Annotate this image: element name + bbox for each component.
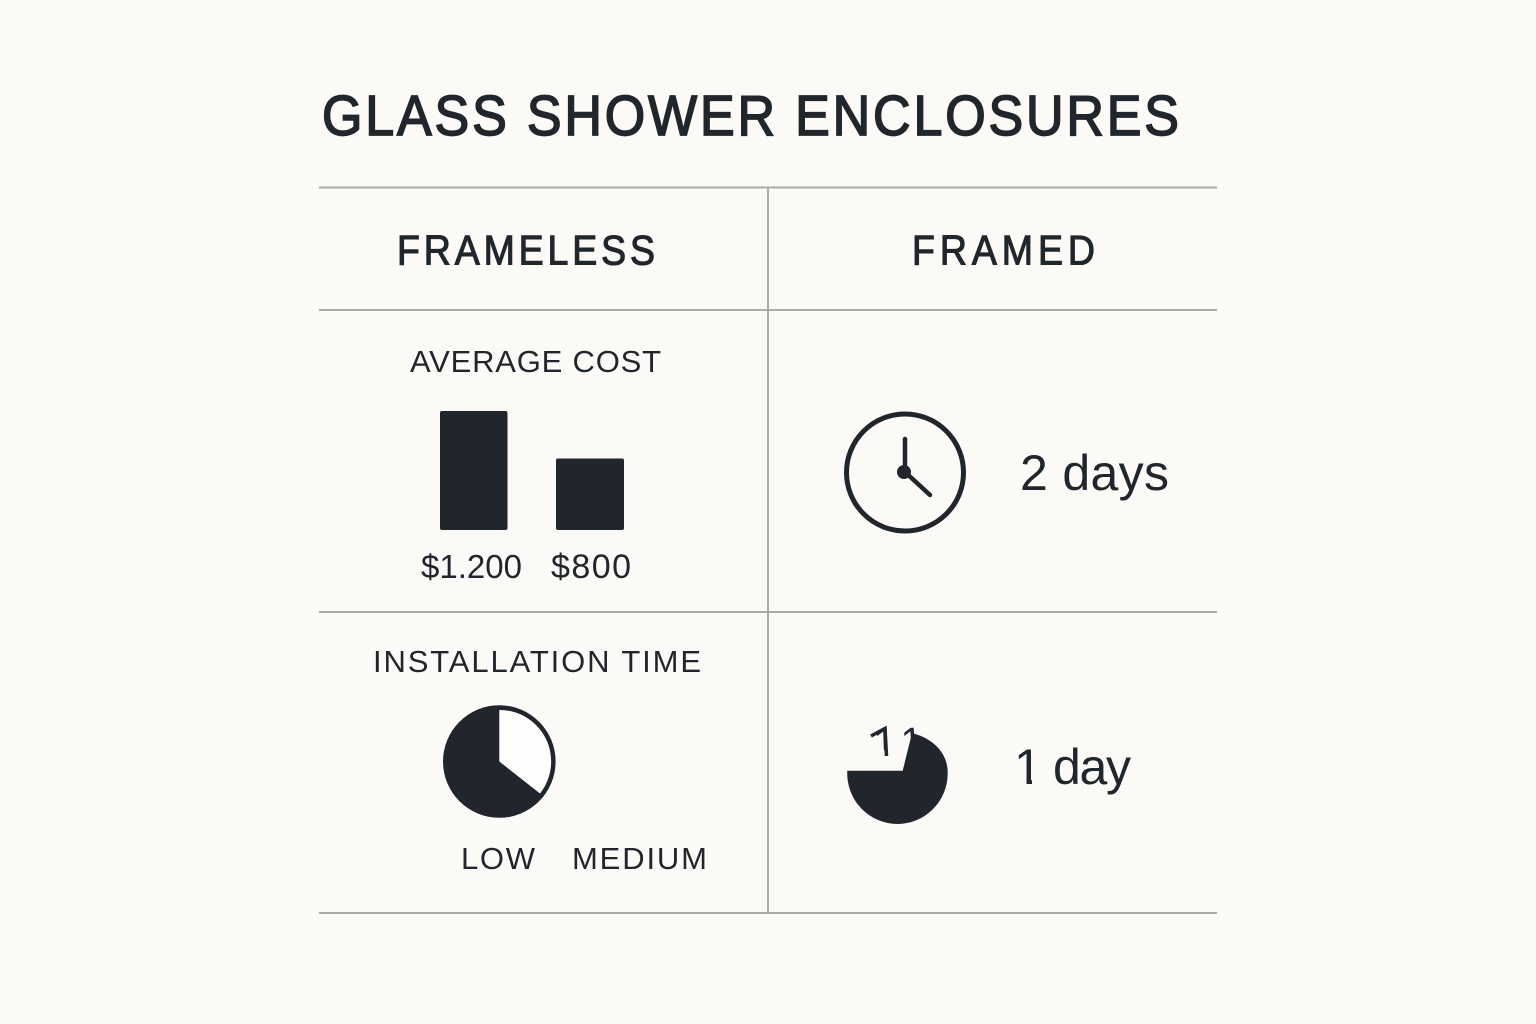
panel: installation time (373, 644, 707, 876)
panel: framed installation duration (846, 414, 1169, 531)
pie label: low: LOW (461, 841, 536, 876)
column heading: framed: FRAMED (912, 228, 1095, 274)
icon: clock (846, 414, 964, 531)
icon: partial pie with clipped numerals: 1 (873, 720, 897, 765)
installation time label: INSTALLATION TIME (373, 644, 701, 679)
duration: 1 day: 1 day (1014, 739, 1131, 795)
duration: 2 days: 2 days (1020, 445, 1169, 501)
icon: partial pie with clipped numerals (847, 720, 948, 824)
average cost label: AVERAGE COST (410, 344, 661, 379)
panel: framed one-day indicator (847, 720, 1131, 824)
bar: $1,200 (440, 411, 508, 530)
icon: partial pie with clipped numerals: 1 (900, 720, 925, 765)
bar chart (440, 411, 624, 530)
bar: $800 (556, 458, 624, 530)
column heading: frameless: FRAMELESS (397, 228, 655, 274)
panel: average cost (410, 344, 661, 586)
comparison table grid (319, 187, 1217, 913)
icon: pie chart (443, 705, 556, 818)
pie label: medium: MEDIUM (572, 841, 707, 876)
title: GLASS SHOWER ENCLOSURES (322, 84, 1179, 148)
bar value: $800: $800 (551, 548, 631, 586)
bar value: $1.200: $1.200 (421, 548, 522, 585)
